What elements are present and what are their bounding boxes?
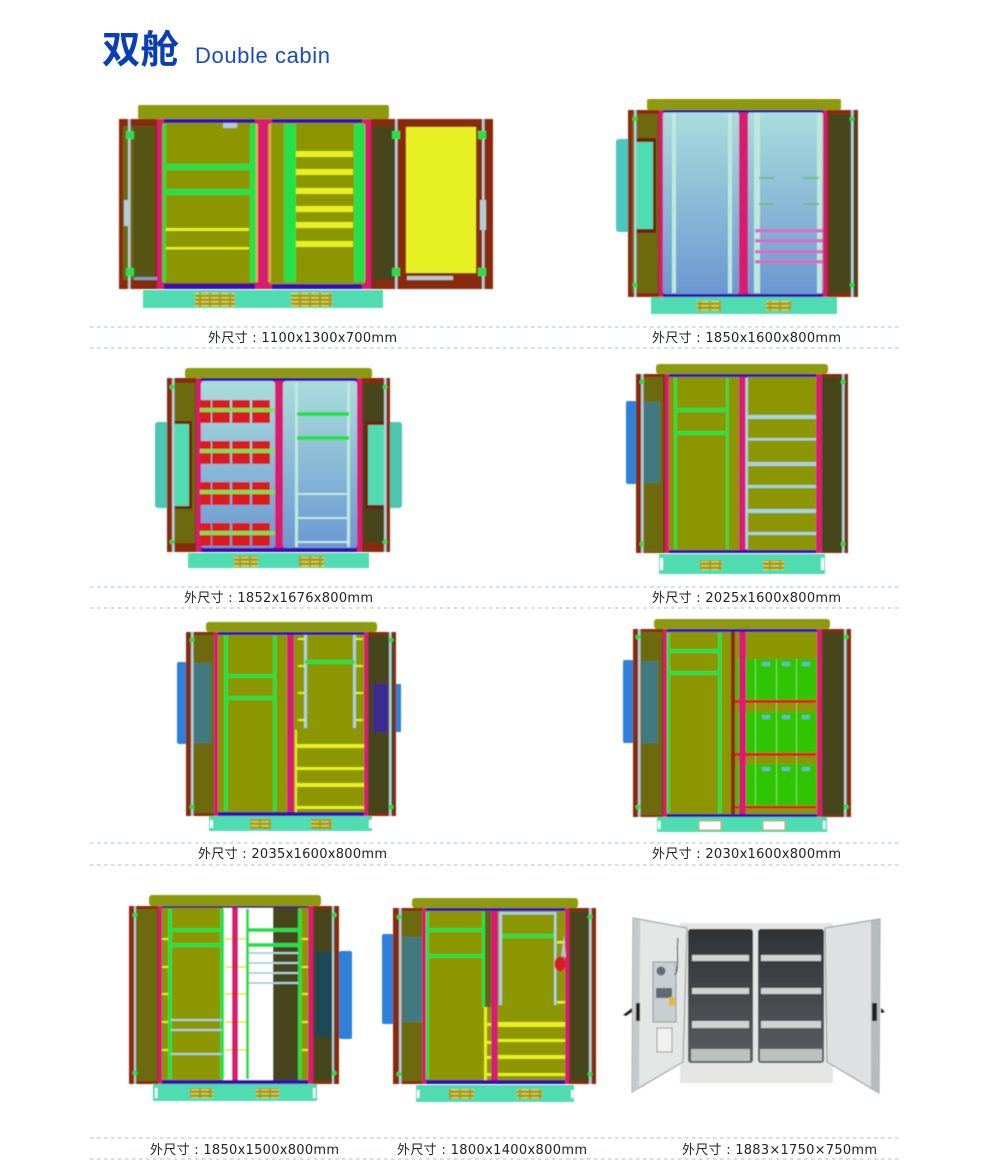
left bay [162, 123, 258, 283]
body frame [167, 378, 390, 552]
caption 7: 外尺寸 : 1850x1500x800mm [150, 1143, 339, 1158]
caption 5 [90, 843, 900, 865]
plinth [416, 1085, 574, 1102]
right door [822, 629, 847, 817]
right door [368, 632, 394, 816]
roof [206, 622, 377, 632]
bays [162, 908, 308, 1080]
cabinet 5 [177, 622, 401, 831]
left bay with red modules [200, 381, 275, 548]
left door [641, 374, 663, 553]
plinth [659, 554, 825, 574]
top and bottom rails [669, 374, 816, 553]
left door [632, 110, 658, 297]
caption 6: 外尺寸 : 2030x1600x800mm [652, 847, 841, 862]
side cooling unit [626, 401, 637, 484]
body frame [186, 632, 396, 816]
left bay [669, 377, 739, 550]
side cooling units [177, 662, 401, 744]
left bay [218, 635, 287, 812]
caption 4: 外尺寸 : 2025x1600x800mm [652, 591, 841, 606]
door hinges [396, 914, 592, 1076]
posts [196, 378, 362, 552]
roof [149, 895, 321, 906]
roof [654, 619, 830, 629]
body frame [129, 906, 339, 1084]
body frame [393, 908, 596, 1084]
cabinet 7 [129, 895, 352, 1101]
side cooling unit [339, 951, 352, 1039]
cabinet 6 [623, 619, 851, 832]
body frame [119, 119, 403, 289]
centre post [491, 908, 498, 1084]
cabinet 3 [155, 368, 402, 568]
right bay [268, 123, 365, 284]
right bay [498, 911, 565, 1080]
caption 1: 外尺寸 : 1100x1300x700mm [208, 331, 397, 346]
posts [422, 908, 569, 1084]
plinth [209, 816, 372, 831]
door hinges [636, 634, 848, 810]
right bay [283, 381, 357, 548]
side cooling unit [616, 139, 636, 232]
cabinet body [680, 923, 833, 1083]
caption 9: 外尺寸 : 1883×1750×750mm [682, 1143, 877, 1158]
right bay [746, 377, 816, 550]
roof [412, 898, 578, 908]
left door [134, 906, 157, 1084]
plinth [651, 297, 837, 314]
title [102, 19, 330, 75]
body frame [633, 629, 851, 817]
icon: red tool [554, 935, 566, 972]
plinth [657, 817, 827, 832]
right door [314, 906, 335, 1084]
heading: English: Double cabin [195, 43, 330, 68]
right bay [748, 112, 823, 294]
posts and rails [157, 119, 371, 289]
left door [123, 119, 174, 289]
air conditioner [653, 962, 676, 1022]
roof [656, 364, 828, 374]
top and bottom rails [426, 908, 565, 1084]
cabinet 9 photo [623, 918, 885, 1093]
right door [829, 110, 857, 297]
left bay [667, 632, 739, 814]
posts [663, 629, 822, 817]
body frame [628, 110, 858, 297]
open door with yellow panel [403, 119, 493, 289]
left door [638, 629, 662, 817]
right bay [294, 635, 364, 812]
side cooling units [155, 422, 402, 508]
right door [570, 908, 592, 1084]
door hinges [632, 116, 854, 288]
plinth [153, 1084, 317, 1101]
roof [647, 99, 841, 110]
top and bottom rails [201, 378, 357, 552]
right compartment [758, 929, 824, 1063]
posts [665, 374, 822, 553]
cabinet 1 [119, 105, 493, 308]
cabinet 8 [382, 898, 596, 1102]
caption 5: 外尺寸 : 2035x1600x800mm [198, 847, 387, 862]
left compartment [688, 929, 753, 1063]
top and bottom rails [218, 632, 364, 816]
right door [363, 378, 386, 552]
cabinet 4 [626, 364, 848, 574]
roof [138, 105, 389, 119]
caption 1 [90, 327, 900, 348]
door hinges [190, 638, 394, 810]
caption 8: 外尺寸 : 1800x1400x800mm [397, 1143, 587, 1158]
caption 2: 外尺寸 : 1850x1600x800mm [652, 331, 841, 346]
heading: Chinese: 双舱 [102, 19, 180, 75]
side cooling unit [623, 660, 634, 743]
caption 3: 外尺寸 : 1852x1676x800mm [184, 591, 373, 606]
cabinet 2 [616, 99, 858, 314]
top and bottom rails [663, 110, 823, 297]
left door [172, 378, 195, 552]
caption 7 [90, 1138, 900, 1159]
left door [191, 632, 214, 816]
right bay with green modules [735, 632, 817, 814]
door hinges [170, 384, 388, 544]
door handles [623, 1003, 885, 1021]
left bay [663, 112, 739, 294]
caption 3 [90, 587, 900, 608]
door hinges [132, 912, 336, 1076]
body frame [636, 374, 848, 553]
posts [158, 906, 313, 1084]
right door [822, 374, 846, 553]
posts [659, 110, 827, 297]
centre post [739, 629, 746, 817]
posts [214, 632, 368, 816]
left bay [426, 911, 491, 1080]
plinth [143, 290, 383, 308]
side cooling unit [382, 934, 394, 1024]
door hinges [640, 380, 846, 546]
left door [632, 918, 687, 1092]
right door [373, 119, 400, 289]
plinth [188, 553, 369, 568]
left door [399, 908, 422, 1084]
right door [825, 919, 880, 1093]
top and bottom rails [667, 629, 817, 817]
roof [185, 368, 372, 379]
